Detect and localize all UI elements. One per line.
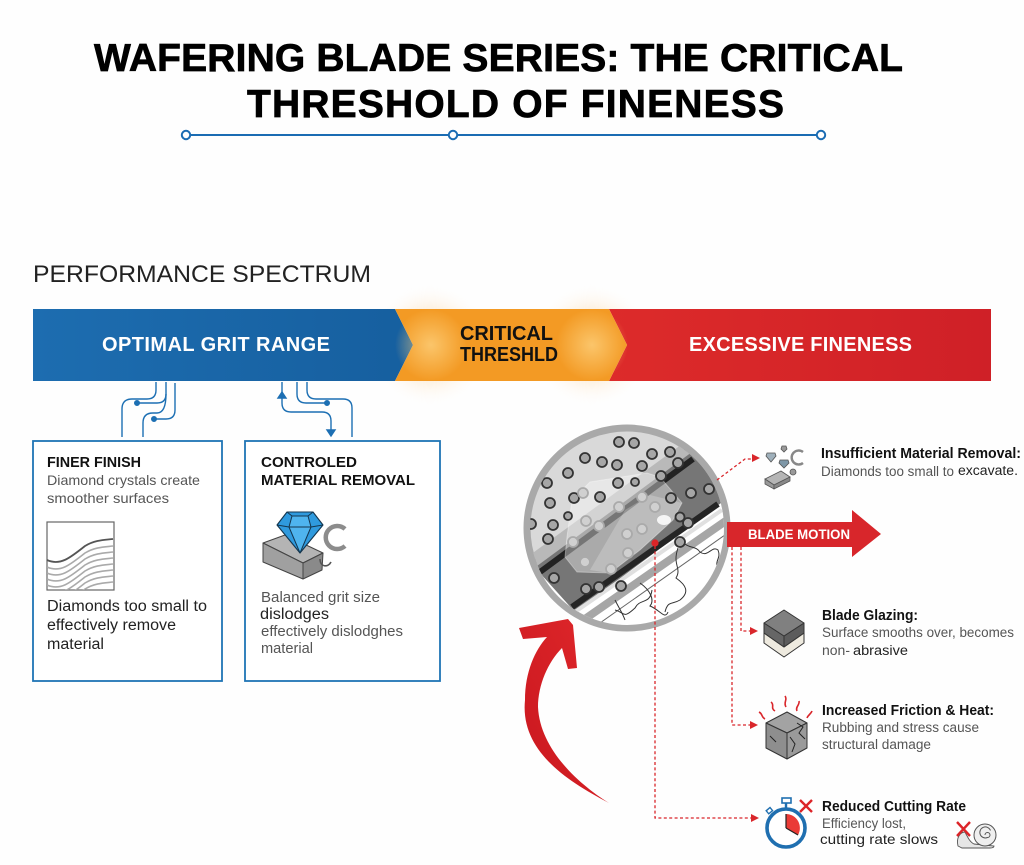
marker dot bbox=[651, 539, 659, 547]
label: critical threshold: THRESHLD bbox=[460, 344, 558, 366]
red cross bbox=[800, 800, 812, 812]
icon: diamonds and chips bbox=[765, 446, 803, 489]
text: blade glazing: Surface smooths over, becomes bbox=[822, 625, 1014, 640]
heading: controlled material removal bbox=[261, 455, 415, 489]
text: increased friction and heat: Rubbing and stress cause bbox=[822, 720, 979, 735]
magnified blade cross-section bbox=[524, 424, 730, 632]
description: finer finish bbox=[47, 472, 200, 506]
description: controlled material removal bbox=[260, 590, 403, 657]
title bbox=[94, 37, 903, 126]
connectors: right panel bbox=[278, 382, 352, 437]
title: THRESHOLD OF FINENESS bbox=[247, 83, 784, 126]
description: controlled material removal: effectively dislodghes bbox=[261, 624, 403, 640]
grit particles bbox=[526, 437, 714, 594]
icon: diamond on block bbox=[263, 512, 345, 579]
text: reduced cutting rate: cutting rate slows bbox=[820, 831, 938, 847]
description: finer finish: Diamond crystals create bbox=[47, 472, 200, 488]
arrow: blade motion bbox=[727, 510, 881, 557]
curved red arrow bbox=[519, 619, 609, 803]
segment: optimal grit range bbox=[33, 309, 413, 381]
description: finer finish: smoother surfaces bbox=[47, 490, 169, 506]
text: increased friction and heat: Increased Friction & Heat: bbox=[822, 703, 994, 719]
panel: controlled material removal bbox=[245, 441, 440, 681]
text: reduced cutting rate bbox=[820, 799, 966, 847]
text: blade glazing bbox=[822, 608, 1014, 658]
icon: glazed block bbox=[764, 610, 804, 657]
red cross bbox=[957, 822, 970, 836]
text: reduced cutting rate: Efficiency lost, bbox=[822, 816, 906, 831]
label: critical threshold: CRITICAL bbox=[460, 323, 553, 345]
text: insufficient material removal: excavate. bbox=[958, 463, 1018, 478]
title underline with nodes bbox=[182, 131, 825, 139]
note: finer finish bbox=[47, 598, 207, 653]
icon: stopwatch bbox=[766, 798, 812, 847]
label: optimal grit range: OPTIMAL GRIT RANGE bbox=[102, 334, 330, 356]
icon: smooth surface layers bbox=[46, 521, 115, 591]
section heading: performance spectrum: PERFORMANCE SPECTRUM bbox=[33, 261, 371, 288]
text: blade glazing: Blade Glazing: bbox=[822, 608, 918, 624]
heading: finer finish: FINER FINISH bbox=[47, 455, 141, 471]
text: insufficient material removal: Insufficient Material Removal: bbox=[821, 446, 1021, 462]
text: increased friction and heat: structural damage bbox=[822, 737, 931, 752]
arrow: blade motion: BLADE MOTION bbox=[748, 527, 850, 542]
title: WAFERING BLADE SERIES: THE CRITICAL bbox=[94, 37, 903, 80]
text: insufficient material removal: Diamonds too small to bbox=[821, 464, 954, 479]
panel: finer finish bbox=[33, 441, 222, 681]
heading: controlled material removal: MATERIAL REMOVAL bbox=[261, 473, 415, 489]
icon: cracked hot cube bbox=[759, 696, 812, 759]
label: excessive fineness: EXCESSIVE FINENESS bbox=[689, 334, 912, 356]
icon: snail with cross bbox=[957, 822, 996, 848]
note: finer finish: effectively remove bbox=[47, 617, 176, 634]
dashed callout lines bbox=[655, 459, 754, 818]
note: finer finish: material bbox=[47, 636, 104, 653]
connectors: left panel bbox=[122, 382, 175, 437]
segment: critical threshold bbox=[395, 309, 627, 381]
text: blade glazing: abrasive bbox=[853, 643, 908, 658]
description: controlled material removal: Balanced grit size bbox=[261, 590, 380, 606]
segment: excessive fineness bbox=[609, 309, 991, 381]
description: controlled material removal: dislodges bbox=[260, 606, 329, 623]
text: insufficient material removal bbox=[821, 446, 1021, 479]
cracks bbox=[615, 540, 720, 620]
performance spectrum bar bbox=[33, 283, 991, 407]
callout arrowheads bbox=[750, 454, 760, 822]
heading: controlled material removal: CONTROLED bbox=[261, 455, 357, 471]
abrasive crystal bbox=[565, 473, 682, 573]
description: controlled material removal: material bbox=[261, 641, 313, 657]
text: increased friction and heat bbox=[822, 703, 994, 752]
label: critical threshold bbox=[460, 323, 558, 366]
text: reduced cutting rate: Reduced Cutting Rate bbox=[822, 799, 966, 815]
text: blade glazing: non- bbox=[822, 643, 850, 658]
note: finer finish: Diamonds too small to bbox=[47, 598, 207, 615]
